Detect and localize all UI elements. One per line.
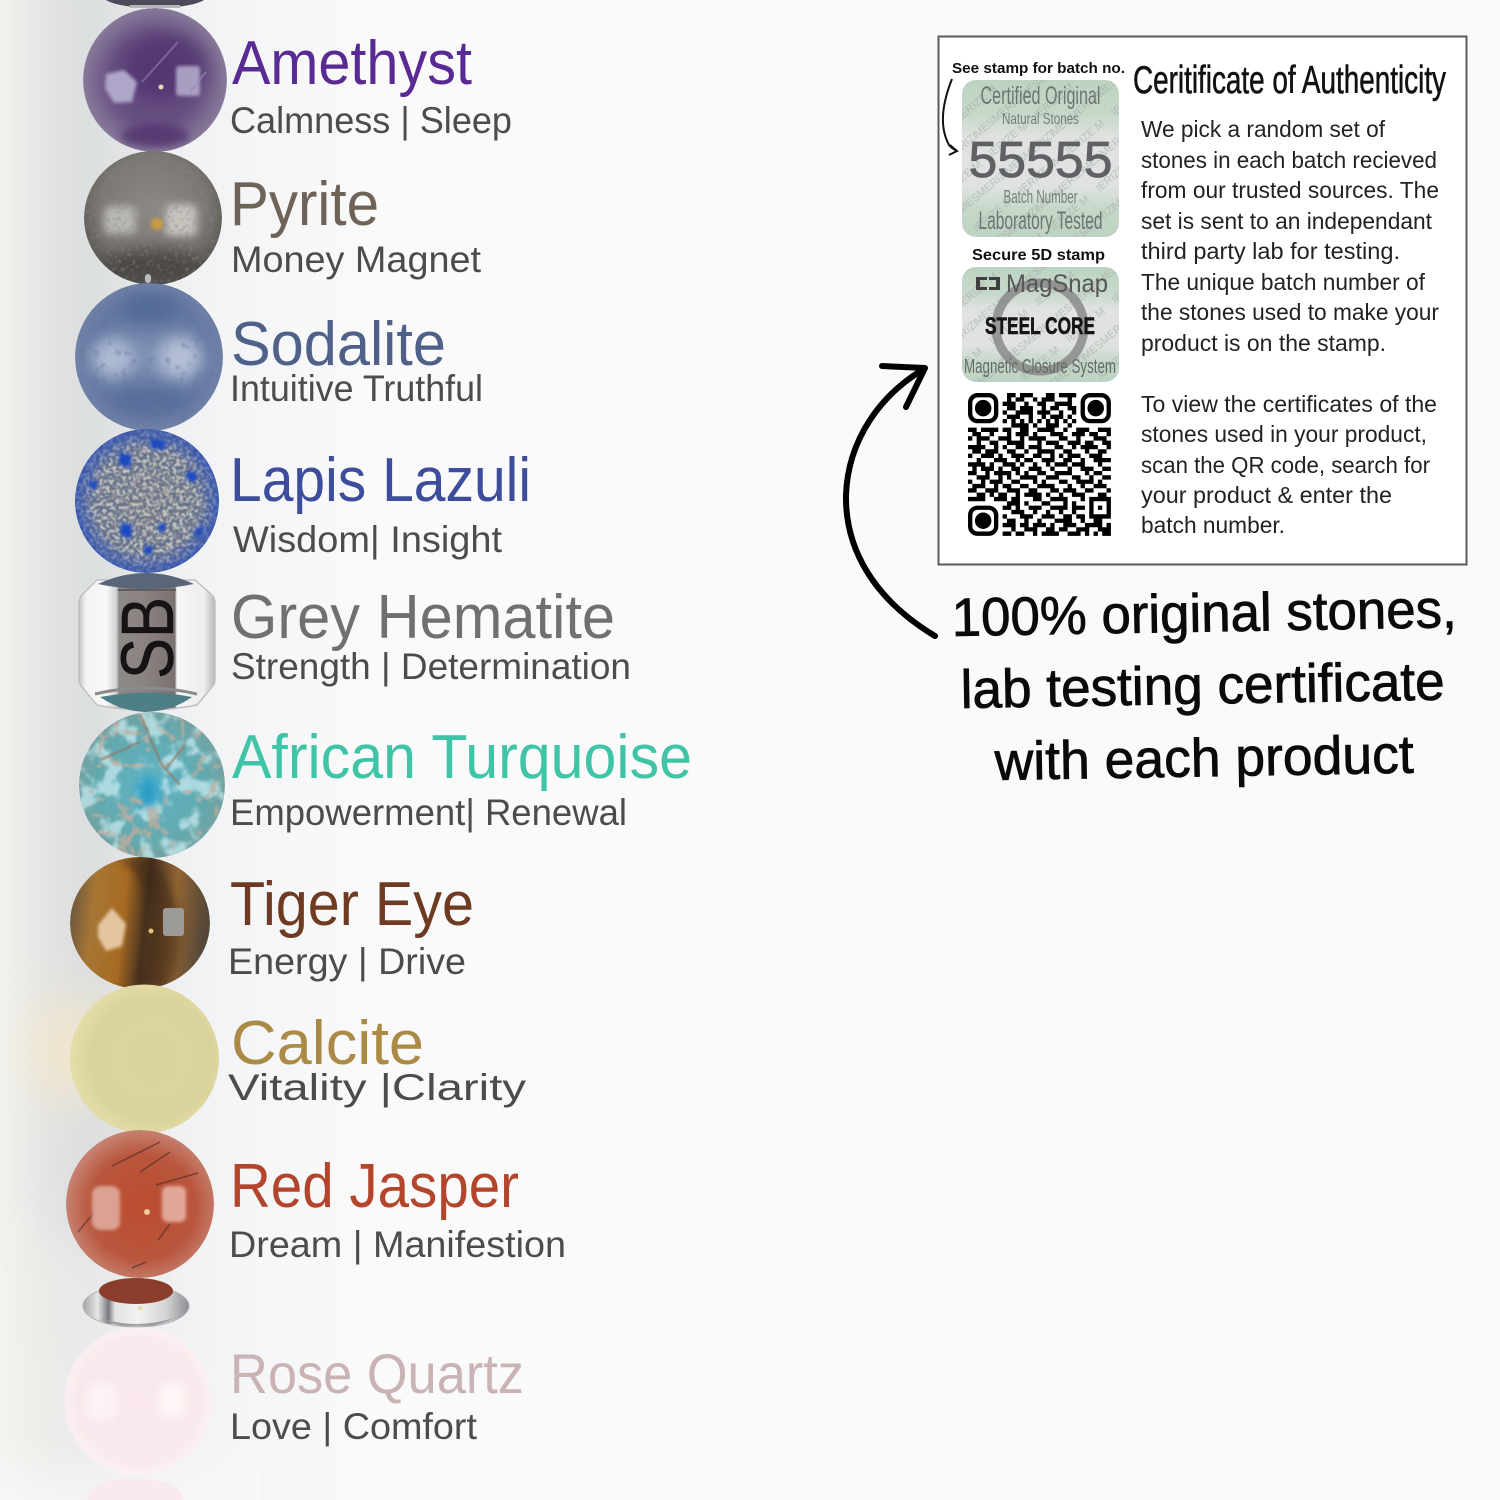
certificate body: how testing works: stones in each batch recieved xyxy=(1141,147,1437,173)
certificate body: how testing works xyxy=(1141,116,1439,356)
arrow: from caption to certificate xyxy=(846,366,935,636)
label: red jasper: Red Jasper xyxy=(230,1152,519,1221)
stamp: batch number: Natural Stones xyxy=(1002,111,1079,128)
bead: lapis lazuli xyxy=(75,429,219,573)
label: sodalite: Intuitive Truthful xyxy=(230,368,483,409)
bead: top partial xyxy=(103,0,207,8)
bead: amethyst xyxy=(83,8,227,152)
label: pyrite: Money Magnet xyxy=(231,239,482,280)
stamp caption: See stamp for batch no. xyxy=(952,60,1125,77)
stamp: batch number: Laboratory Tested xyxy=(978,207,1102,235)
bead: red jasper xyxy=(66,1130,214,1278)
bead: pyrite xyxy=(84,151,222,285)
callout: original stones claim xyxy=(951,579,1457,792)
certificate body: how to view: batch number. xyxy=(1141,512,1285,538)
stamp: steel core: Magnetic Closure System xyxy=(964,356,1116,378)
label: amethyst: Calmness | Sleep xyxy=(230,100,512,141)
label: grey hematite: Grey Hematite xyxy=(231,583,615,652)
label: lapis lazuli: Wisdom| Insight xyxy=(233,519,503,560)
label: grey hematite xyxy=(231,583,631,687)
certificate body: how testing works: the stones used to make your xyxy=(1141,299,1439,325)
bead: silver rondelle spacer xyxy=(83,1278,189,1327)
stamp: batch number: 55555 xyxy=(968,131,1112,188)
certificate body: how testing works: third party lab for testing. xyxy=(1141,238,1400,264)
bead: african turquoise xyxy=(79,712,225,858)
certificate body: how to view: your product & enter the xyxy=(1141,482,1392,508)
label: calcite: Vitality |Clarity xyxy=(228,1067,527,1108)
bead: grey hematite spacer xyxy=(79,573,215,712)
certificate body: how testing works: We pick a random set of xyxy=(1141,116,1386,142)
label: red jasper: Dream | Manifestion xyxy=(229,1224,566,1265)
bead: rose quartz xyxy=(64,1327,212,1500)
callout: original stones claim: lab testing certificate xyxy=(960,652,1445,720)
label: lapis lazuli xyxy=(230,446,531,560)
label: african turquoise: Empowerment| Renewal xyxy=(230,792,627,833)
stamp: steel core: STEEL CORE xyxy=(985,313,1095,340)
label: african turquoise: African Turquoise xyxy=(232,723,692,792)
stamp: batch number xyxy=(962,80,1119,237)
certificate body: how to view: scan the QR code, search for xyxy=(1141,452,1430,478)
label: rose quartz: Rose Quartz xyxy=(230,1342,524,1405)
label: sodalite xyxy=(230,310,483,409)
certificate body: how to view: To view the certificates of the xyxy=(1141,391,1437,417)
label: grey hematite: Strength | Determination xyxy=(231,646,631,687)
stone labels xyxy=(228,29,692,1447)
caption: secure stamp: Secure 5D stamp xyxy=(972,247,1105,264)
stamp: batch number: Certified Original xyxy=(980,82,1100,110)
label: red jasper xyxy=(229,1152,566,1265)
label: pyrite xyxy=(230,170,482,280)
bead: calcite xyxy=(70,984,219,1134)
label: tiger eye: Tiger Eye xyxy=(230,870,474,939)
label: tiger eye xyxy=(228,870,474,982)
label: amethyst xyxy=(230,29,512,141)
panel: certificate of authenticity xyxy=(938,36,1466,564)
label: lapis lazuli: Lapis Lazuli xyxy=(230,446,531,515)
label: calcite: Calcite xyxy=(231,1009,424,1078)
label: tiger eye: Energy | Drive xyxy=(228,941,466,982)
label: rose quartz xyxy=(230,1342,524,1447)
QR code xyxy=(968,395,1111,534)
certificate body: how to view: stones used in your product, xyxy=(1141,421,1427,447)
label: rose quartz: Love | Comfort xyxy=(230,1406,478,1447)
label: amethyst: Amethyst xyxy=(232,29,472,98)
callout: original stones claim: with each product xyxy=(993,725,1414,792)
bead column xyxy=(64,0,227,1500)
callout: original stones claim: 100% original stones, xyxy=(951,579,1457,648)
bead: tiger eye xyxy=(70,855,210,989)
label: pyrite: Pyrite xyxy=(230,170,379,239)
certificate body: how testing works: The unique batch number of xyxy=(1141,269,1426,295)
certificate body: how testing works: from our trusted sources. The xyxy=(1141,177,1439,203)
certificate body: how testing works: product is on the stamp. xyxy=(1141,330,1386,356)
small curved arrow xyxy=(943,79,957,155)
label: african turquoise xyxy=(230,723,692,833)
label: sodalite: Sodalite xyxy=(231,310,446,379)
certificate body: how to view xyxy=(1141,391,1437,538)
certificate body: how testing works: set is sent to an independant xyxy=(1141,208,1433,234)
engraved letters: SB xyxy=(106,597,189,679)
label: calcite xyxy=(228,1009,527,1108)
stamp: steel core xyxy=(962,267,1119,382)
stamp: batch number: Batch Number xyxy=(1004,187,1078,207)
stamp: steel core: MagSnap xyxy=(1006,270,1108,298)
bead: sodalite xyxy=(75,283,223,431)
